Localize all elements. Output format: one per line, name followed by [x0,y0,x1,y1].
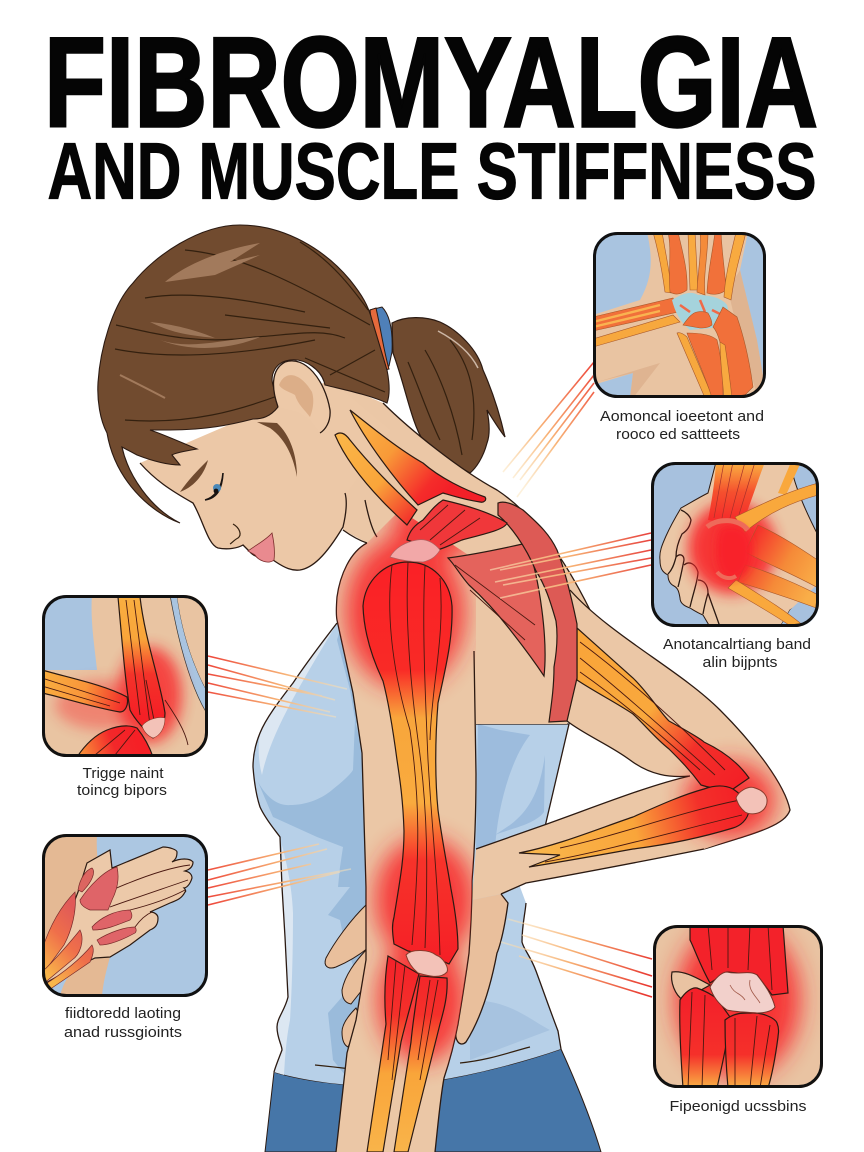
panel: lower left inset: anad russgioints [64,1025,182,1041]
panel: lower left inset [42,834,208,1041]
eye [205,473,223,500]
eyebrow [180,460,208,492]
lower tendons [677,307,753,398]
hair scrunchie [370,307,392,371]
figure: woman with inflamed muscles [98,225,790,1152]
title [44,11,818,215]
raised arm upper muscle [577,628,749,789]
nose line [230,524,240,544]
caption: fiidtoredd laoting [65,1006,181,1022]
back hand fingers [325,903,368,1047]
panel: middle right inset [651,462,822,671]
left tendons [593,298,678,331]
forearm muscles [367,956,447,1152]
pain rays: lower left [208,844,351,905]
tank top [253,620,569,1086]
lips [248,533,274,562]
panel: top right inset: rooco ed sattteets [616,427,740,443]
caption: Fipeonigd ucssbins [670,1099,806,1115]
pain rays: top right [503,362,594,497]
caption: Trigge naint [82,766,164,782]
caption: Anotancalrtiang band [663,637,811,653]
inflammation glow: elbow [685,762,775,838]
raised forearm [472,776,760,900]
panel: lower right inset [653,922,823,1115]
ponytail [392,318,505,473]
raised elbow joint [736,787,767,814]
shoulder joint [390,540,440,562]
elbow joint [406,950,447,976]
panel: top right inset [593,232,768,443]
hand on lower back [450,849,508,1044]
near arm [336,543,476,1152]
inflammation glows: arm and shoulder [345,495,488,1062]
middle muscle [683,312,712,328]
caption: Aomoncal ioeetont and [600,409,764,425]
long arm muscle [363,562,458,964]
raised upper arm [567,590,790,849]
pain rays: lower right [501,919,652,997]
trapezius strip [498,502,577,722]
hair [98,225,389,523]
panel: upper left inset [42,595,209,799]
torso skin and neck [330,380,590,800]
panel: middle right inset: alin bijpnts [702,655,778,671]
ear [274,361,330,433]
scapula muscle [448,543,545,676]
raised arm forearm muscle [519,786,749,867]
face [140,380,390,570]
panel: upper left inset: toincg bipors [77,783,167,799]
pain rays: middle right [490,533,651,598]
top tendons [653,232,746,300]
torn tissue [672,293,728,330]
shoulder muscle [407,500,507,550]
pain rays: upper left [208,656,347,717]
jeans [265,1049,601,1152]
neck muscles [335,410,486,525]
